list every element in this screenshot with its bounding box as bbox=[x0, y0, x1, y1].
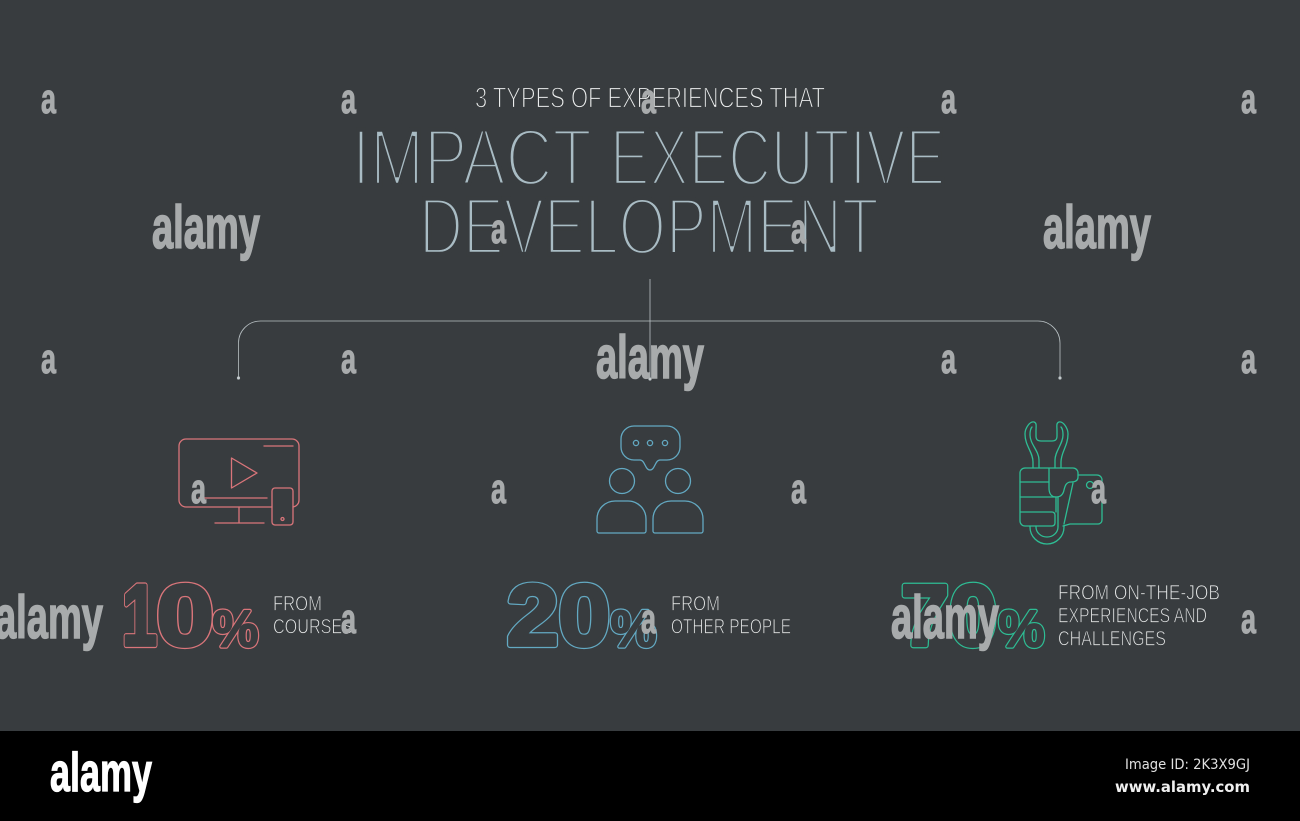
stat: 10%: 1 bbox=[122, 568, 157, 664]
watermark overlay: a bbox=[941, 75, 956, 122]
watermark overlay: a bbox=[191, 465, 206, 512]
label: from courses: COURSES bbox=[273, 616, 353, 638]
stat: 70% bbox=[901, 568, 1044, 664]
watermark overlay: a bbox=[1091, 465, 1106, 512]
label: from other people: OTHER PEOPLE bbox=[671, 616, 791, 638]
watermark overlay: a bbox=[791, 465, 806, 512]
icon: monitor with play button and phone bbox=[179, 439, 299, 525]
label: from other people: FROM bbox=[671, 592, 720, 616]
label: from courses bbox=[273, 592, 353, 638]
watermark overlay: a bbox=[1241, 595, 1256, 642]
label: from on-the-job experiences and challenges: CHALLENGES bbox=[1058, 628, 1166, 650]
watermark overlay: a bbox=[641, 75, 656, 122]
stat: 10%: 1 bbox=[122, 568, 157, 664]
label: from courses: FROM bbox=[273, 592, 322, 616]
stat: 70%: 70 bbox=[901, 568, 997, 664]
image id: Image ID: 2K3X9GJ bbox=[1125, 757, 1250, 773]
stat: 70%: % bbox=[998, 600, 1044, 658]
icon: two people with speech bubble bbox=[597, 426, 703, 533]
stat: 20% bbox=[507, 568, 656, 664]
watermark overlay: a bbox=[341, 75, 356, 122]
watermark overlay: a bbox=[41, 75, 56, 122]
stat: 20%: % bbox=[610, 600, 656, 658]
footer logo: alamy bbox=[50, 741, 152, 803]
subtitle: 3 TYPES OF EXPERIENCES THAT bbox=[475, 82, 825, 114]
title: EXECUTIVE bbox=[610, 113, 945, 203]
watermark overlay: a bbox=[341, 595, 356, 642]
watermark overlay: alamy bbox=[596, 324, 704, 391]
watermark overlay: a bbox=[491, 205, 506, 252]
watermark overlay: alamy bbox=[152, 194, 260, 261]
title: DEVELOPMENT bbox=[419, 182, 879, 272]
watermark overlay: a bbox=[491, 465, 506, 512]
watermark overlay: a bbox=[791, 205, 806, 252]
stat: 10% bbox=[122, 568, 258, 664]
stat: 70%: % bbox=[998, 600, 1044, 658]
watermark overlay: alamy bbox=[1043, 194, 1151, 261]
footer bar bbox=[0, 731, 1300, 821]
stat: 10%: % bbox=[212, 600, 258, 658]
stat: 20%: 20 bbox=[507, 568, 610, 664]
stat: 10%: 0 bbox=[157, 568, 214, 664]
panel: other people bbox=[507, 426, 791, 664]
stat: 70%: 70 bbox=[901, 568, 997, 664]
watermark overlay bbox=[0, 75, 1256, 651]
stat: 10%: % bbox=[212, 600, 258, 658]
watermark overlay: alamy bbox=[0, 584, 103, 651]
stat: 20%: % bbox=[610, 600, 656, 658]
watermark overlay: a bbox=[941, 335, 956, 382]
watermark overlay: a bbox=[1241, 75, 1256, 122]
label: from on-the-job experiences and challenges bbox=[1058, 582, 1220, 650]
watermark overlay: a bbox=[341, 335, 356, 382]
title: IMPACT bbox=[352, 113, 592, 203]
watermark overlay: a bbox=[41, 335, 56, 382]
panel: courses bbox=[122, 439, 353, 664]
stat: 20%: 20 bbox=[507, 568, 610, 664]
connector tree bbox=[237, 279, 1061, 380]
watermark overlay: a bbox=[641, 595, 656, 642]
watermark overlay: alamy bbox=[891, 584, 999, 651]
title bbox=[352, 113, 945, 272]
stat: 10%: 0 bbox=[157, 568, 214, 664]
label: from on-the-job experiences and challenges: EXPERIENCES AND bbox=[1058, 604, 1207, 628]
footer url: www.alamy.com bbox=[1115, 778, 1250, 796]
label: from other people bbox=[671, 592, 791, 638]
watermark overlay: a bbox=[1241, 335, 1256, 382]
panel: on-the-job bbox=[901, 422, 1220, 664]
icon: hand holding wrench and phone bbox=[1020, 422, 1102, 544]
label: from on-the-job experiences and challenges: FROM ON-THE-JOB bbox=[1058, 582, 1220, 604]
